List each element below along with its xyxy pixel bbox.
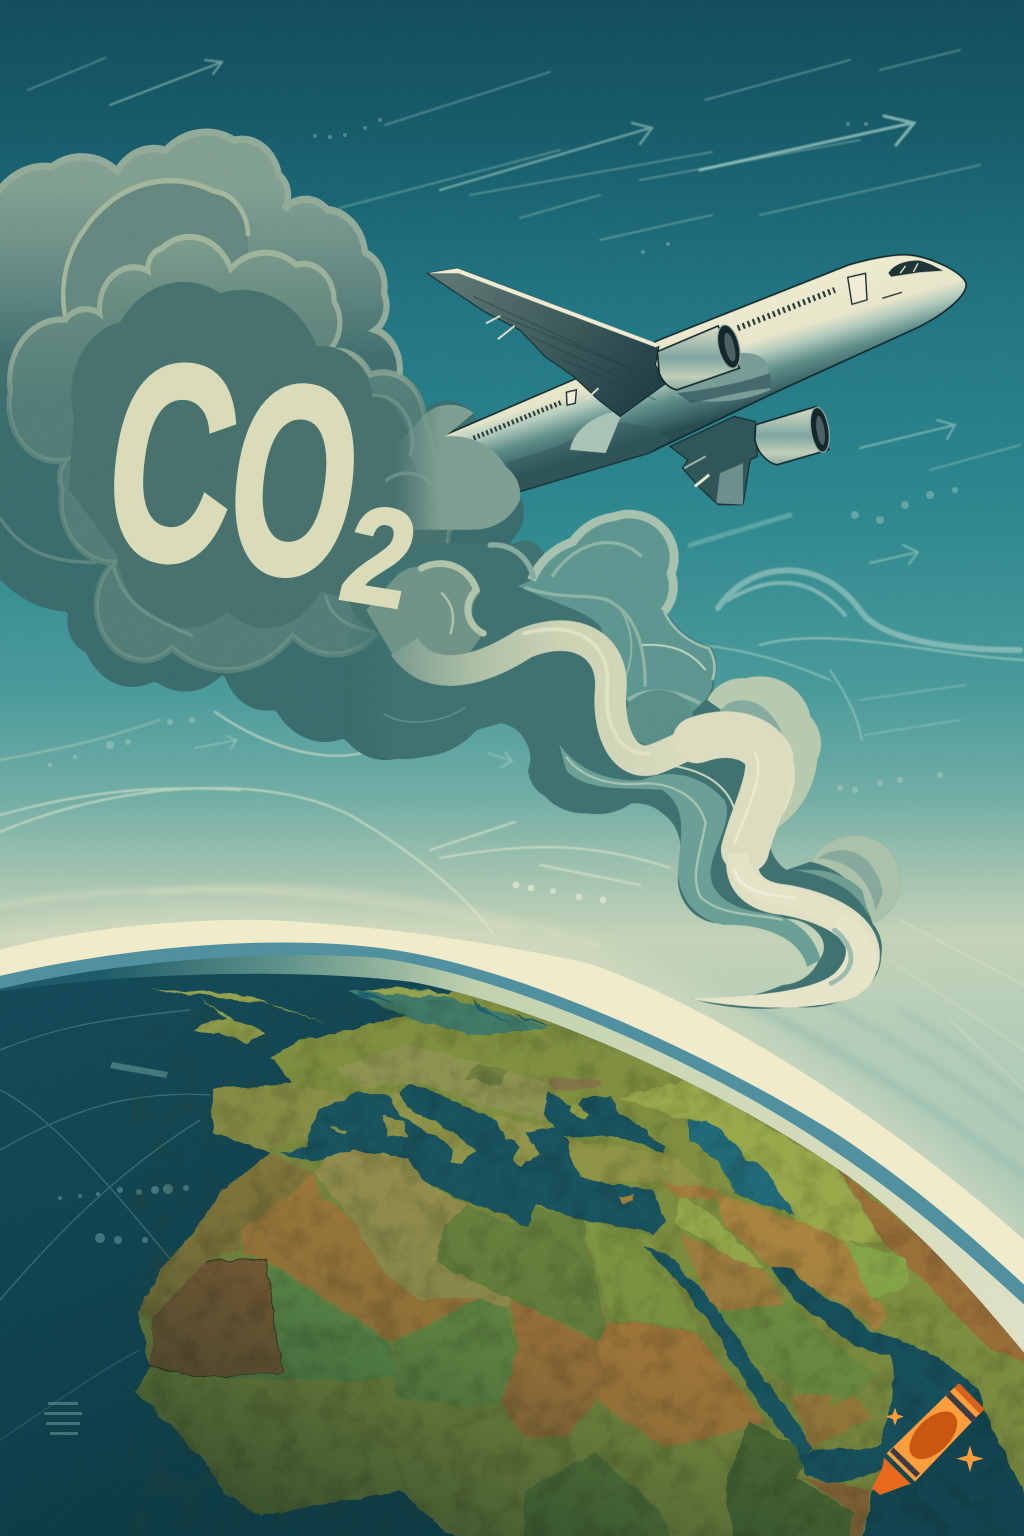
flap fairings xyxy=(486,316,598,400)
cloud outer body xyxy=(0,132,524,760)
crayon label oval xyxy=(901,1403,966,1468)
smoke trail xyxy=(346,511,901,1009)
ghost lobe inner swirls xyxy=(525,542,705,703)
puff rims near the cloud junction xyxy=(421,545,533,633)
Ethiopia region xyxy=(724,1420,854,1536)
atmosphere: pale inner band xyxy=(0,955,1024,1536)
wing-body fairing xyxy=(570,410,623,453)
trail silhouette xyxy=(346,511,901,1009)
fuselage xyxy=(441,255,966,491)
inner dark cloud core xyxy=(69,282,447,635)
Horn region xyxy=(801,1476,872,1536)
rear body shading xyxy=(506,420,670,491)
upper ghost lobe xyxy=(518,514,715,753)
Mali region xyxy=(206,1264,397,1381)
main windows xyxy=(738,290,835,328)
atmosphere: cream band xyxy=(0,920,1024,1536)
near wing xyxy=(427,268,666,416)
sky dots and faint symbols xyxy=(48,118,958,904)
ribbon tapered tail xyxy=(690,913,878,1008)
Chad region xyxy=(501,1299,607,1437)
crayon upper stripe xyxy=(946,1392,976,1422)
northern Europe patches xyxy=(347,989,548,1037)
back cloud layer xyxy=(63,181,248,334)
smoke band under the main ribbon xyxy=(559,743,821,967)
Europe tones xyxy=(336,1044,548,1122)
arrow: top left xyxy=(110,60,222,105)
atmosphere glow above the horizon xyxy=(0,920,1024,1245)
British Isles xyxy=(194,998,265,1043)
rear door xyxy=(566,390,576,405)
land base xyxy=(135,980,1024,1536)
CO2 lettering xyxy=(92,305,429,638)
CO2 cloud xyxy=(0,132,524,760)
crayon tip xyxy=(872,1458,911,1495)
dots near horizon xyxy=(512,882,606,904)
upper rim highlight xyxy=(0,132,400,375)
cloud covering the tail xyxy=(395,405,520,530)
letter C: C xyxy=(92,305,254,622)
curved wind lines near the horizon xyxy=(0,712,1024,1090)
arrow: right lower xyxy=(870,545,918,564)
nose line xyxy=(882,292,902,298)
north-west coast region xyxy=(138,1154,315,1317)
far wing xyxy=(670,416,757,505)
arrow: below cloud xyxy=(488,752,512,768)
Balearic island xyxy=(330,1125,347,1133)
crayon watermark badge xyxy=(872,1384,984,1495)
Italy xyxy=(389,1086,477,1163)
small sparkle xyxy=(886,1408,904,1426)
Mauritania region xyxy=(150,1260,284,1377)
north European seas xyxy=(359,991,554,1026)
Central Africa region xyxy=(524,1452,677,1536)
eastern regions xyxy=(838,1169,1024,1362)
Indian Ocean xyxy=(861,1388,1024,1536)
airplane xyxy=(395,255,966,530)
front door xyxy=(848,273,867,304)
atmosphere: blue band xyxy=(0,942,1024,1536)
cockpit window xyxy=(888,261,943,277)
ghost lobe rim xyxy=(532,514,674,612)
arrow: lower left xyxy=(195,736,237,749)
far engine xyxy=(755,406,832,465)
ribbon highlights xyxy=(525,629,649,754)
large sparkle xyxy=(956,1445,984,1472)
tan Sahara region xyxy=(315,1150,514,1307)
wind streaks and arrows in the sky xyxy=(0,50,1024,1090)
Egypt region xyxy=(583,1221,696,1330)
Niger region xyxy=(394,1297,518,1406)
Algeria region xyxy=(241,1173,480,1342)
crayon body xyxy=(887,1387,980,1482)
subscript 2: 2 xyxy=(329,477,429,638)
junction puff xyxy=(366,562,483,673)
near engine xyxy=(657,323,744,390)
arrow: top centre xyxy=(440,123,652,190)
Arabian regions xyxy=(682,1235,784,1311)
Persian Gulf and Gulf of Aden xyxy=(770,1267,978,1484)
land mottling xyxy=(130,1000,1024,1536)
arrow: right middle xyxy=(860,420,955,448)
soft bump contours xyxy=(0,395,445,636)
crayon lower stripe xyxy=(890,1447,920,1477)
rear windows xyxy=(474,403,561,438)
Sardinia xyxy=(383,1115,407,1137)
ocean grid lines xyxy=(0,1010,220,1440)
globe xyxy=(0,920,1024,1536)
Mediterranean Sea xyxy=(280,1083,665,1234)
swirling wisp on the right xyxy=(640,570,1024,740)
Red Sea xyxy=(645,1246,814,1456)
shading toward the south-west xyxy=(135,1112,1024,1536)
dots upper sky xyxy=(48,118,958,793)
soft streaks along the atmosphere xyxy=(0,887,1024,1175)
letter O: O xyxy=(214,327,375,633)
Libya region xyxy=(436,1205,607,1343)
map of Europe, Africa and Middle East xyxy=(130,980,1024,1536)
Sudan region xyxy=(598,1320,766,1448)
wing texture lines xyxy=(474,297,656,400)
Turkey region xyxy=(562,1140,718,1189)
puffy mid layer xyxy=(9,237,454,670)
lower small curl lobe xyxy=(810,835,901,923)
wing leading edge xyxy=(427,268,661,347)
upper wind streaks xyxy=(28,50,1020,735)
engine pylon bulge xyxy=(670,353,771,402)
ocean marks xyxy=(44,1062,189,1435)
arrow: top right xyxy=(700,116,914,170)
ocean xyxy=(0,974,1024,1536)
crayon end cap xyxy=(954,1384,984,1414)
dark pocket in trail xyxy=(625,690,693,747)
Caspian Sea xyxy=(689,1120,795,1216)
main cream ribbon xyxy=(404,636,864,967)
Greece xyxy=(496,1115,548,1168)
Black Sea xyxy=(545,1090,665,1154)
Cyprus xyxy=(618,1193,633,1202)
ribbon dark inner lines xyxy=(831,930,851,983)
right lobe behind cream band xyxy=(707,676,821,833)
